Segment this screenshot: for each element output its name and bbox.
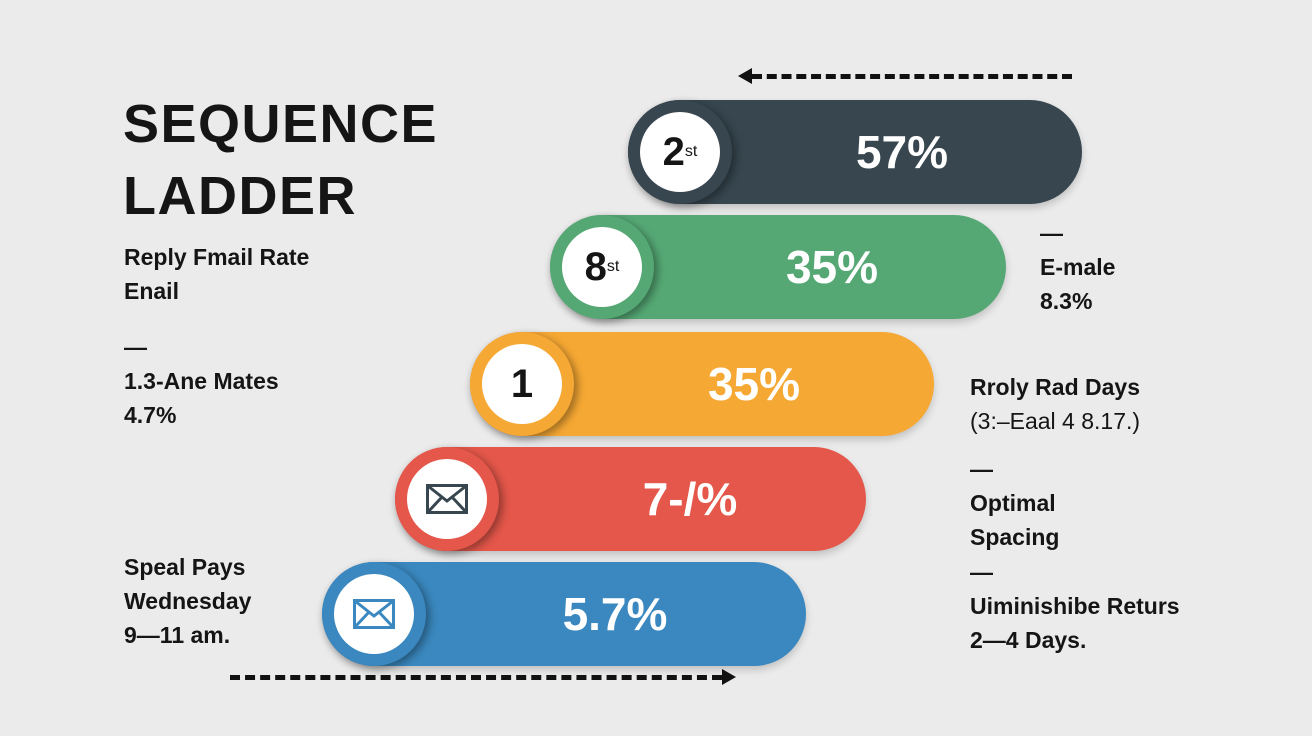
bar 2 <box>550 215 1006 319</box>
value 5.7%: 5.7% <box>563 588 667 640</box>
value 35%: 35% <box>708 358 800 410</box>
right text: optimal spacing: Optimal <box>970 490 1056 516</box>
right text: optimal spacing: Spacing <box>970 524 1059 550</box>
bar 4 <box>395 447 866 551</box>
value 7-/%: 7-/% <box>643 473 737 525</box>
right text: diminishing returns: Uiminishibe Returs <box>970 593 1180 619</box>
left text: notes <box>124 334 279 428</box>
title <box>123 94 438 226</box>
arrow: bottom dashed right <box>230 669 736 685</box>
badge envelope <box>322 562 426 666</box>
right text: e-male <box>1040 220 1115 314</box>
right text: diminishing returns <box>970 559 1180 653</box>
title: LADDER <box>123 166 357 226</box>
bar 1 <box>628 100 1082 204</box>
left text: notes: — <box>124 334 147 360</box>
right text: reply days: (3:–Eaal 4 8.17.) <box>970 408 1140 434</box>
left text: speal pays: Speal Pays <box>124 554 245 580</box>
right text: diminishing returns: 2—4 Days. <box>970 627 1086 653</box>
badge 2st: 2 <box>663 130 685 174</box>
bar 5 <box>322 562 806 666</box>
badge 1 <box>470 332 574 436</box>
arrow: top dashed left <box>738 68 1072 84</box>
badge 2st: st <box>685 143 697 160</box>
value 57%: 57% <box>856 126 948 178</box>
right text: reply days <box>970 374 1140 434</box>
right text: reply days: Rroly Rad Days <box>970 374 1140 400</box>
right text: optimal spacing: — <box>970 456 993 482</box>
left text: speal pays: Wednesday <box>124 588 251 614</box>
left text: reply rate: Enail <box>124 278 179 304</box>
value 35%: 35% <box>786 241 878 293</box>
left text: speal pays <box>124 554 252 648</box>
badge 2st <box>628 100 732 204</box>
left text: reply rate: Reply Fmail Rate <box>124 244 309 270</box>
badge 8st <box>550 215 654 319</box>
left text: reply rate <box>124 244 309 304</box>
badge envelope <box>395 447 499 551</box>
title: SEQUENCE <box>123 94 438 154</box>
right text: optimal spacing <box>970 456 1059 550</box>
left text: notes: 1.3-Ane Mates <box>124 368 279 394</box>
badge 8st: 8 <box>585 244 607 288</box>
right text: e-male: E-male <box>1040 254 1115 280</box>
badge 1: 1 <box>511 362 533 406</box>
badge 8st: st <box>607 258 619 275</box>
right text: e-male: — <box>1040 220 1063 246</box>
left text: notes: 4.7% <box>124 402 176 428</box>
bar 3 <box>470 332 934 436</box>
right text: diminishing returns: — <box>970 559 993 585</box>
right text: e-male: 8.3% <box>1040 288 1092 314</box>
left text: speal pays: 9—11 am. <box>124 622 230 648</box>
